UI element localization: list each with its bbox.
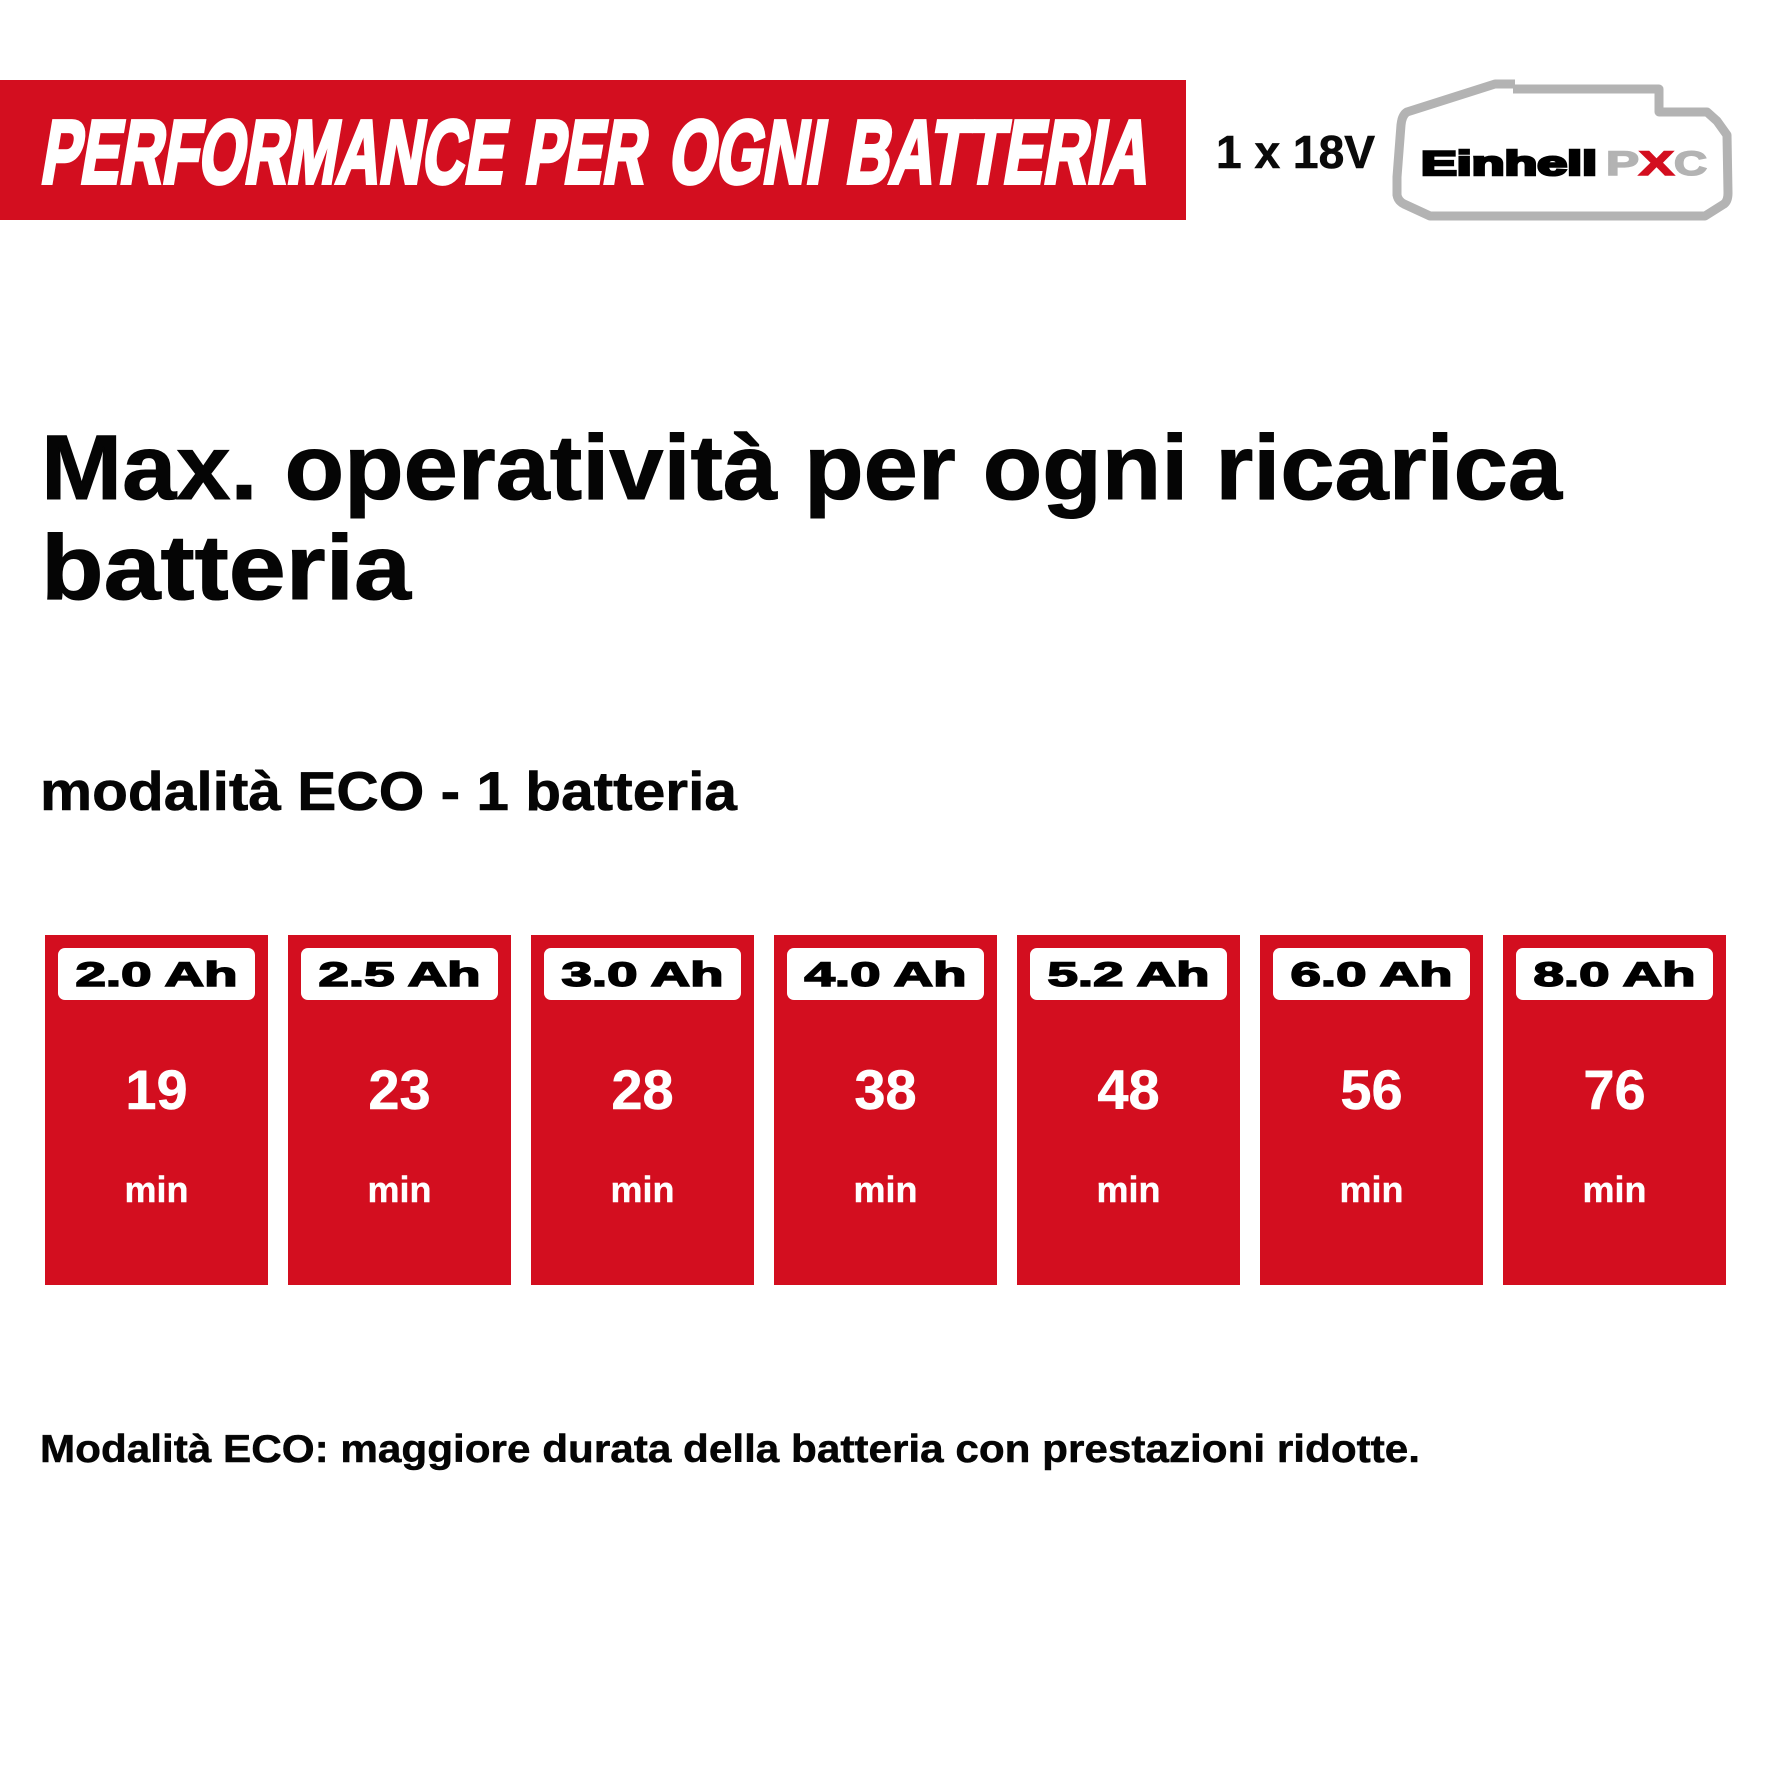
card: 3.0 Ah xyxy=(531,935,754,1285)
card: 8.0 Ah: 76 xyxy=(1583,1058,1646,1121)
card: 4.0 Ah: min xyxy=(853,1169,918,1210)
logo letter P: P xyxy=(1606,145,1639,183)
footnote: Modalità ECO: maggiore durata della batteria con prestazioni ridotte. xyxy=(40,1428,1420,1471)
card: 2.0 Ah xyxy=(45,935,268,1285)
card: 3.0 Ah: 28 xyxy=(611,1058,674,1121)
runtime cards xyxy=(45,935,1726,1285)
logo word Einhell: Einhell xyxy=(1421,145,1597,183)
card: 8.0 Ah xyxy=(1503,935,1726,1285)
banner title xyxy=(36,103,1159,203)
card: 6.0 Ah xyxy=(1260,935,1483,1285)
card: 6.0 Ah: min xyxy=(1339,1169,1404,1210)
card: 4.0 Ah xyxy=(774,935,997,1285)
card: 6.0 Ah: 56 xyxy=(1340,1058,1403,1121)
card: 8.0 Ah: 8.0 Ah xyxy=(1534,956,1696,994)
card: 5.2 Ah: min xyxy=(1096,1169,1161,1210)
icon: battery outline with Einhell PXC logo xyxy=(1397,84,1728,216)
subheading: modalità ECO - 1 batteria xyxy=(40,760,737,822)
banner title: OGNI xyxy=(664,103,834,203)
banner background xyxy=(0,80,1186,220)
card: 2.5 Ah: 23 xyxy=(368,1058,431,1121)
card: 5.2 Ah: 5.2 Ah xyxy=(1048,956,1210,994)
card: 3.0 Ah: 3.0 Ah xyxy=(562,956,724,994)
card: 2.5 Ah: min xyxy=(367,1169,432,1210)
card: 2.0 Ah: 19 xyxy=(125,1058,188,1121)
card: 2.0 Ah: 2.0 Ah xyxy=(76,956,238,994)
card: 4.0 Ah: 38 xyxy=(854,1058,917,1121)
card: 4.0 Ah: 4.0 Ah xyxy=(804,956,966,994)
card: 5.2 Ah xyxy=(1017,935,1240,1285)
card: 2.0 Ah: min xyxy=(124,1169,189,1210)
logo letter C: C xyxy=(1674,145,1707,183)
banner title: PERFORMANCE xyxy=(36,103,515,203)
card: 5.2 Ah: 48 xyxy=(1097,1058,1160,1121)
logo letter X: X xyxy=(1639,145,1674,183)
voltage label: 1 x 18V xyxy=(1216,126,1375,178)
card: 8.0 Ah: min xyxy=(1582,1169,1647,1210)
battery outline xyxy=(1397,84,1728,216)
card: 2.5 Ah xyxy=(288,935,511,1285)
heading line 2: batteria xyxy=(41,517,412,619)
banner title: PER xyxy=(520,103,656,203)
card: 3.0 Ah: min xyxy=(610,1169,675,1210)
banner title: BATTERIA xyxy=(841,103,1159,203)
main heading xyxy=(41,417,1563,619)
card: 6.0 Ah: 6.0 Ah xyxy=(1290,956,1452,994)
card: 2.5 Ah: 2.5 Ah xyxy=(318,956,480,994)
header banner xyxy=(0,80,1186,220)
heading line 1: Max. operatività per ogni ricarica xyxy=(41,417,1563,519)
